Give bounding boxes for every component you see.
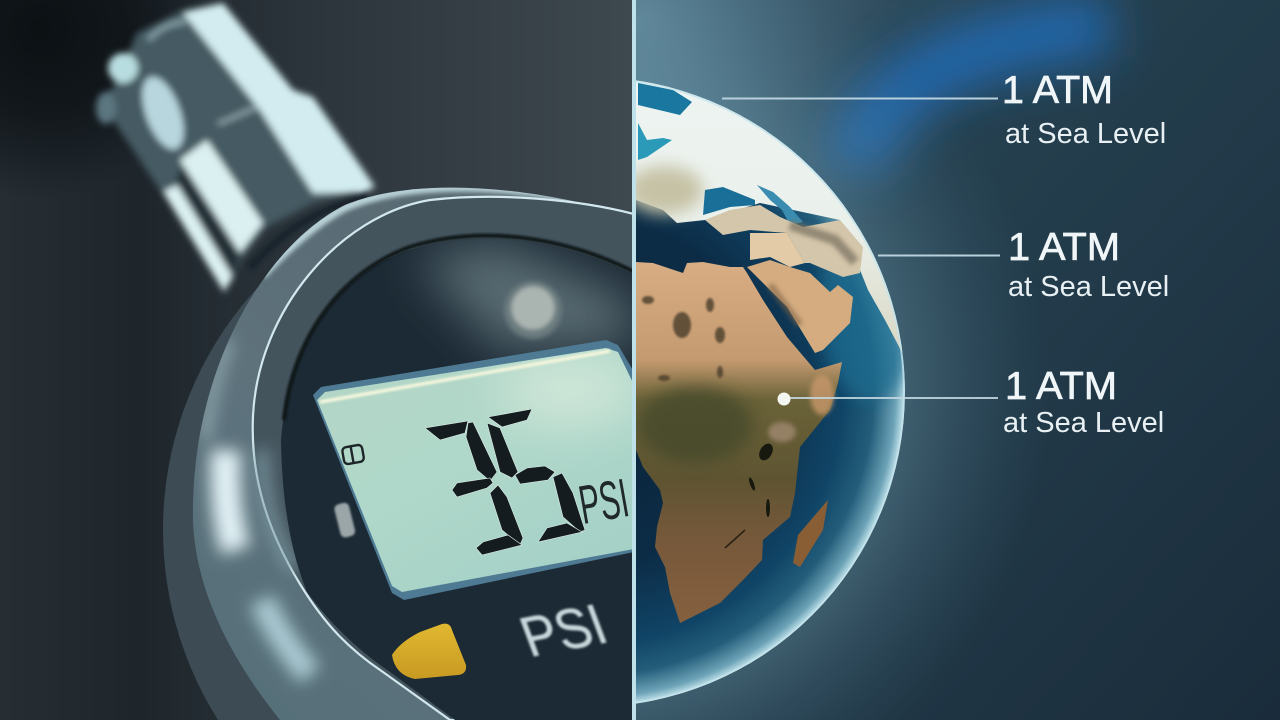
callout: middle marker (878, 232, 1168, 296)
icon: round indicator button (504, 281, 562, 339)
Black Sea (703, 187, 755, 215)
icon: yellow warning button (392, 624, 466, 679)
background: deep blue space (636, 0, 1280, 720)
northern seas (638, 83, 692, 115)
arctic ice and Europe (636, 80, 902, 353)
label: PSI: PSI (511, 592, 615, 669)
Africa (636, 262, 842, 623)
glow: blue atmospheric arc (855, 25, 1110, 170)
Caspian Sea (757, 185, 803, 225)
icon: battery mark (342, 444, 364, 465)
divider between gauge and globe (632, 0, 636, 720)
callout: upper marker: at Sea Level (1005, 118, 1166, 150)
limb highlight (636, 80, 905, 704)
background: dark studio backdrop (0, 0, 634, 720)
icon: metal gauge stem (96, 3, 375, 295)
glow: atmosphere halo (636, 42, 1005, 720)
icon: Earth globe (636, 80, 905, 704)
Iraq and northern Arabia (750, 233, 805, 267)
icon: gauge outer metal ring (163, 187, 634, 720)
callout: middle marker: 1 ATM (1008, 226, 1120, 269)
Madagascar (793, 500, 828, 567)
East Africa highlands (810, 375, 834, 415)
callout: lower marker: at Sea Level (1003, 407, 1164, 439)
central Africa lakes (725, 441, 776, 548)
callout: upper marker: 1 ATM (1002, 69, 1113, 112)
callout: lower marker (778, 372, 1162, 432)
callout: middle marker: at Sea Level (1008, 271, 1169, 303)
icon: side clip (333, 502, 356, 538)
callout: upper marker (722, 76, 1164, 144)
LCD display (300, 340, 640, 610)
ring inner band and bright rim (253, 197, 634, 720)
Sahara relief (642, 296, 725, 381)
icon: dark gauge face (281, 236, 634, 720)
panel: tire pressure gauge (0, 0, 640, 720)
Arabian Peninsula (747, 260, 853, 353)
panel: Earth atmosphere (636, 0, 1280, 720)
central Africa rainforest (637, 387, 753, 463)
callout: lower marker: 1 ATM (1005, 365, 1117, 408)
small PSI reading unit: PSI (575, 468, 633, 536)
reading: 35 seven-segment digits (425, 409, 585, 555)
ocean (636, 80, 905, 704)
Turkey and Middle East land (705, 205, 863, 277)
